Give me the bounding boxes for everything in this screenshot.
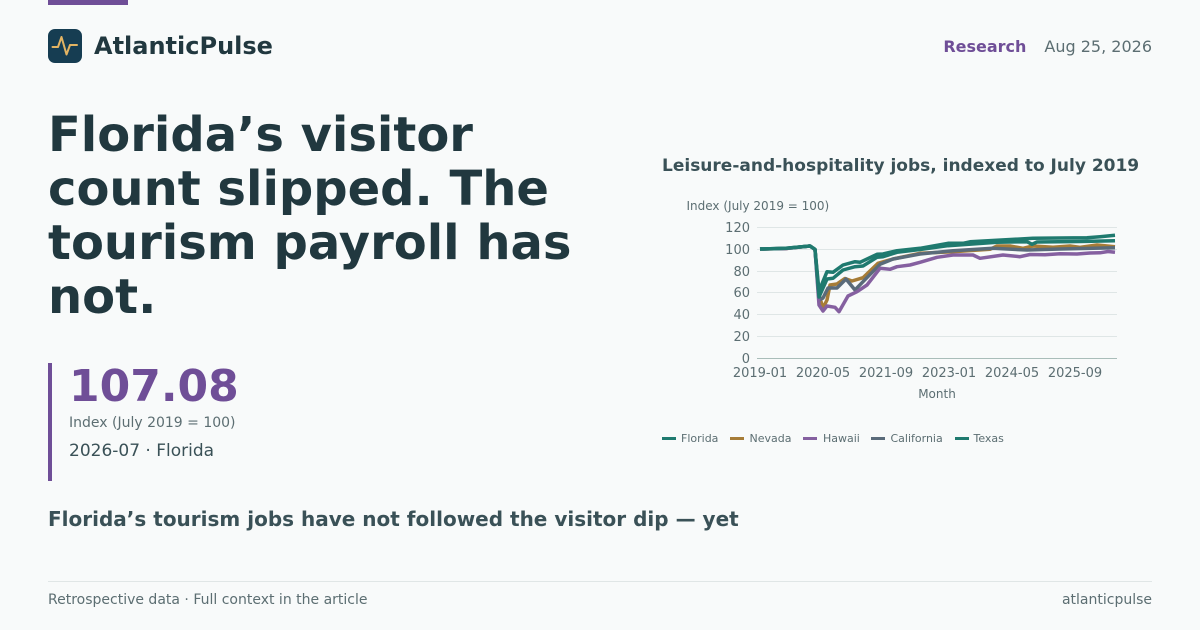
footer brand: atlanticpulse <box>1062 592 1152 608</box>
takeaway text: Florida’s tourism jobs have not followed the visitor dip — yet <box>48 507 739 531</box>
y axis labels: 120 <box>725 221 750 236</box>
y axis labels: 100 <box>725 243 750 258</box>
title: tourism payroll has <box>48 215 571 271</box>
stat label: Index (July 2019 = 100) <box>69 415 236 431</box>
x axis labels <box>733 366 1102 381</box>
stat context: 2026-07 · Florida <box>69 441 214 461</box>
series: California <box>760 246 1115 300</box>
icon: pulse logo <box>48 29 82 63</box>
y axis labels: 60 <box>733 286 750 301</box>
footer note: Retrospective data · Full context in the article <box>48 592 367 608</box>
y axis labels: 40 <box>733 308 750 323</box>
legend: California: California <box>890 432 943 445</box>
x axis labels: 2019-01 <box>733 366 787 381</box>
stat value: 107.08 <box>69 361 239 412</box>
legend: Hawaii <box>803 432 860 445</box>
chart title: Leisure-and-hospitality jobs, indexed to July 2019 <box>662 156 1139 176</box>
legend: Nevada: Nevada <box>750 432 791 445</box>
title <box>48 107 571 325</box>
x axis labels: 2023-01 <box>922 366 976 381</box>
legend: Texas: Texas <box>972 432 1004 445</box>
title: count slipped. The <box>48 161 549 217</box>
legend: Florida: Florida <box>681 432 718 445</box>
footer divider <box>48 581 1152 582</box>
brand name: AtlanticPulse <box>94 32 273 60</box>
y axis labels: 80 <box>733 265 750 280</box>
legend: Hawaii: Hawaii <box>823 432 860 445</box>
x axis labels: 2021-09 <box>859 366 913 381</box>
top accent bar <box>48 0 128 5</box>
x axis labels: 2024-05 <box>985 366 1039 381</box>
title: not. <box>48 269 156 325</box>
x axis labels: 2025-09 <box>1048 366 1102 381</box>
legend: Nevada <box>730 432 791 445</box>
y axis labels: 20 <box>733 330 750 345</box>
legend: Florida <box>662 432 718 445</box>
title: Florida’s visitor <box>48 107 473 163</box>
header: brand <box>48 29 273 63</box>
legend: Texas <box>955 432 1004 445</box>
callout: key stat <box>48 363 252 481</box>
header: category and date: Research Aug 25, 2026 <box>943 37 1152 56</box>
legend <box>662 432 1004 445</box>
series: Florida <box>760 241 1115 297</box>
y axis title: Index (July 2019 = 100) <box>686 199 829 213</box>
series: Nevada <box>760 245 1115 308</box>
x axis labels: 2020-05 <box>796 366 850 381</box>
series: Hawaii <box>760 246 1115 312</box>
y axis labels <box>725 221 750 367</box>
series: Texas <box>760 235 1115 291</box>
line chart <box>662 199 1117 445</box>
y axis labels: 0 <box>742 352 750 367</box>
x axis title: Month <box>918 387 956 401</box>
